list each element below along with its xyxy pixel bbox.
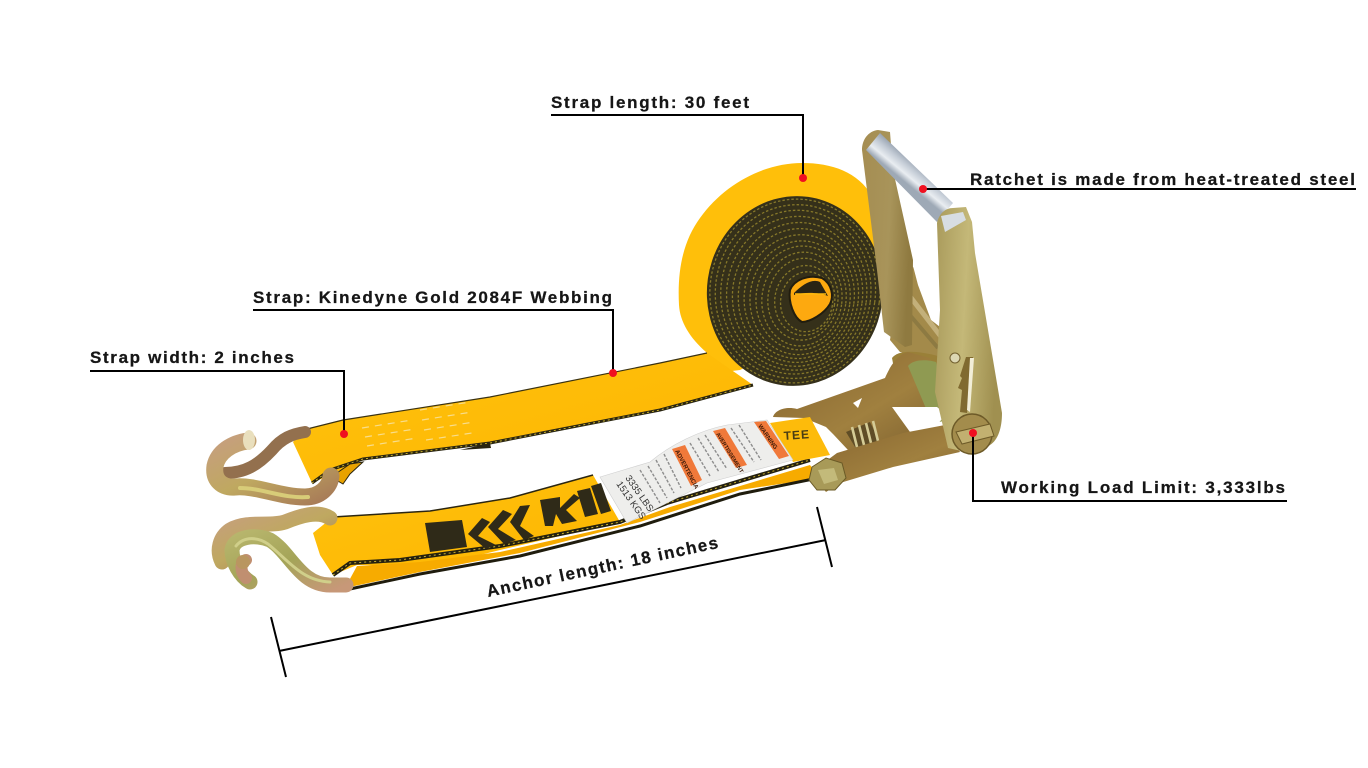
illustration: ratchet strap product bbox=[215, 130, 1002, 589]
hook tip bbox=[243, 430, 255, 450]
ratchet lower arm bbox=[810, 425, 960, 492]
warning headings: ADVERTENCIA bbox=[673, 449, 699, 491]
imprint: TEE: TEE bbox=[783, 427, 810, 443]
black printed logo marks bbox=[425, 483, 611, 552]
callout: strap width bbox=[90, 348, 348, 438]
lower J-hook bbox=[219, 514, 346, 585]
worn stitching patch bbox=[362, 402, 474, 446]
strap roll dark wound face bbox=[695, 185, 895, 397]
steel handle bar bbox=[866, 133, 953, 222]
hook tip lower bbox=[236, 555, 250, 569]
strap roll outer yellow band bbox=[679, 163, 884, 372]
load rating: 3335 LBS bbox=[623, 473, 655, 514]
ratchet upper arm, bronze bbox=[773, 352, 935, 450]
warning label: 1513 KGS bbox=[614, 479, 648, 522]
callout: strap length bbox=[551, 93, 807, 182]
warning label bbox=[600, 420, 793, 523]
dimension: anchor length bbox=[271, 507, 832, 677]
hex bolt bbox=[809, 458, 846, 490]
upper strap webbing bbox=[293, 353, 753, 484]
ratchet spool bbox=[908, 360, 950, 422]
callout: strap webbing bbox=[253, 288, 617, 377]
ratchet gear spring bbox=[846, 421, 882, 452]
warning label: WARNING bbox=[756, 424, 778, 451]
callout: working load limit bbox=[969, 429, 1287, 501]
lower strap webbing bbox=[313, 417, 830, 589]
dimension: anchor length: Anchor length: 18 inches bbox=[485, 533, 720, 601]
ratchet pivot nut bbox=[952, 414, 994, 454]
callout: ratchet material: Ratchet is made from heat-treated steel bbox=[970, 170, 1355, 189]
strap end by ratchet bbox=[770, 417, 830, 462]
ratchet front handle plate bbox=[935, 207, 1002, 454]
fine print lines bbox=[640, 425, 761, 503]
callout: strap webbing: Strap: Kinedyne Gold 2084F Webbing bbox=[253, 288, 612, 307]
roll centre hole bbox=[790, 277, 832, 322]
warning strips bbox=[672, 445, 702, 486]
callout: strap length: Strap length: 30 feet bbox=[551, 93, 749, 112]
warning label: AVERTISSEMENT bbox=[714, 432, 744, 475]
arm window cut-outs bbox=[853, 398, 946, 432]
ratchet base frame rear bbox=[890, 255, 945, 410]
ratchet back handle plate bbox=[862, 130, 913, 347]
upper J-hook bbox=[215, 430, 331, 497]
callout: working load limit: Working Load Limit: 3,333lbs bbox=[1001, 478, 1285, 497]
callout: strap width: Strap width: 2 inches bbox=[90, 348, 294, 367]
